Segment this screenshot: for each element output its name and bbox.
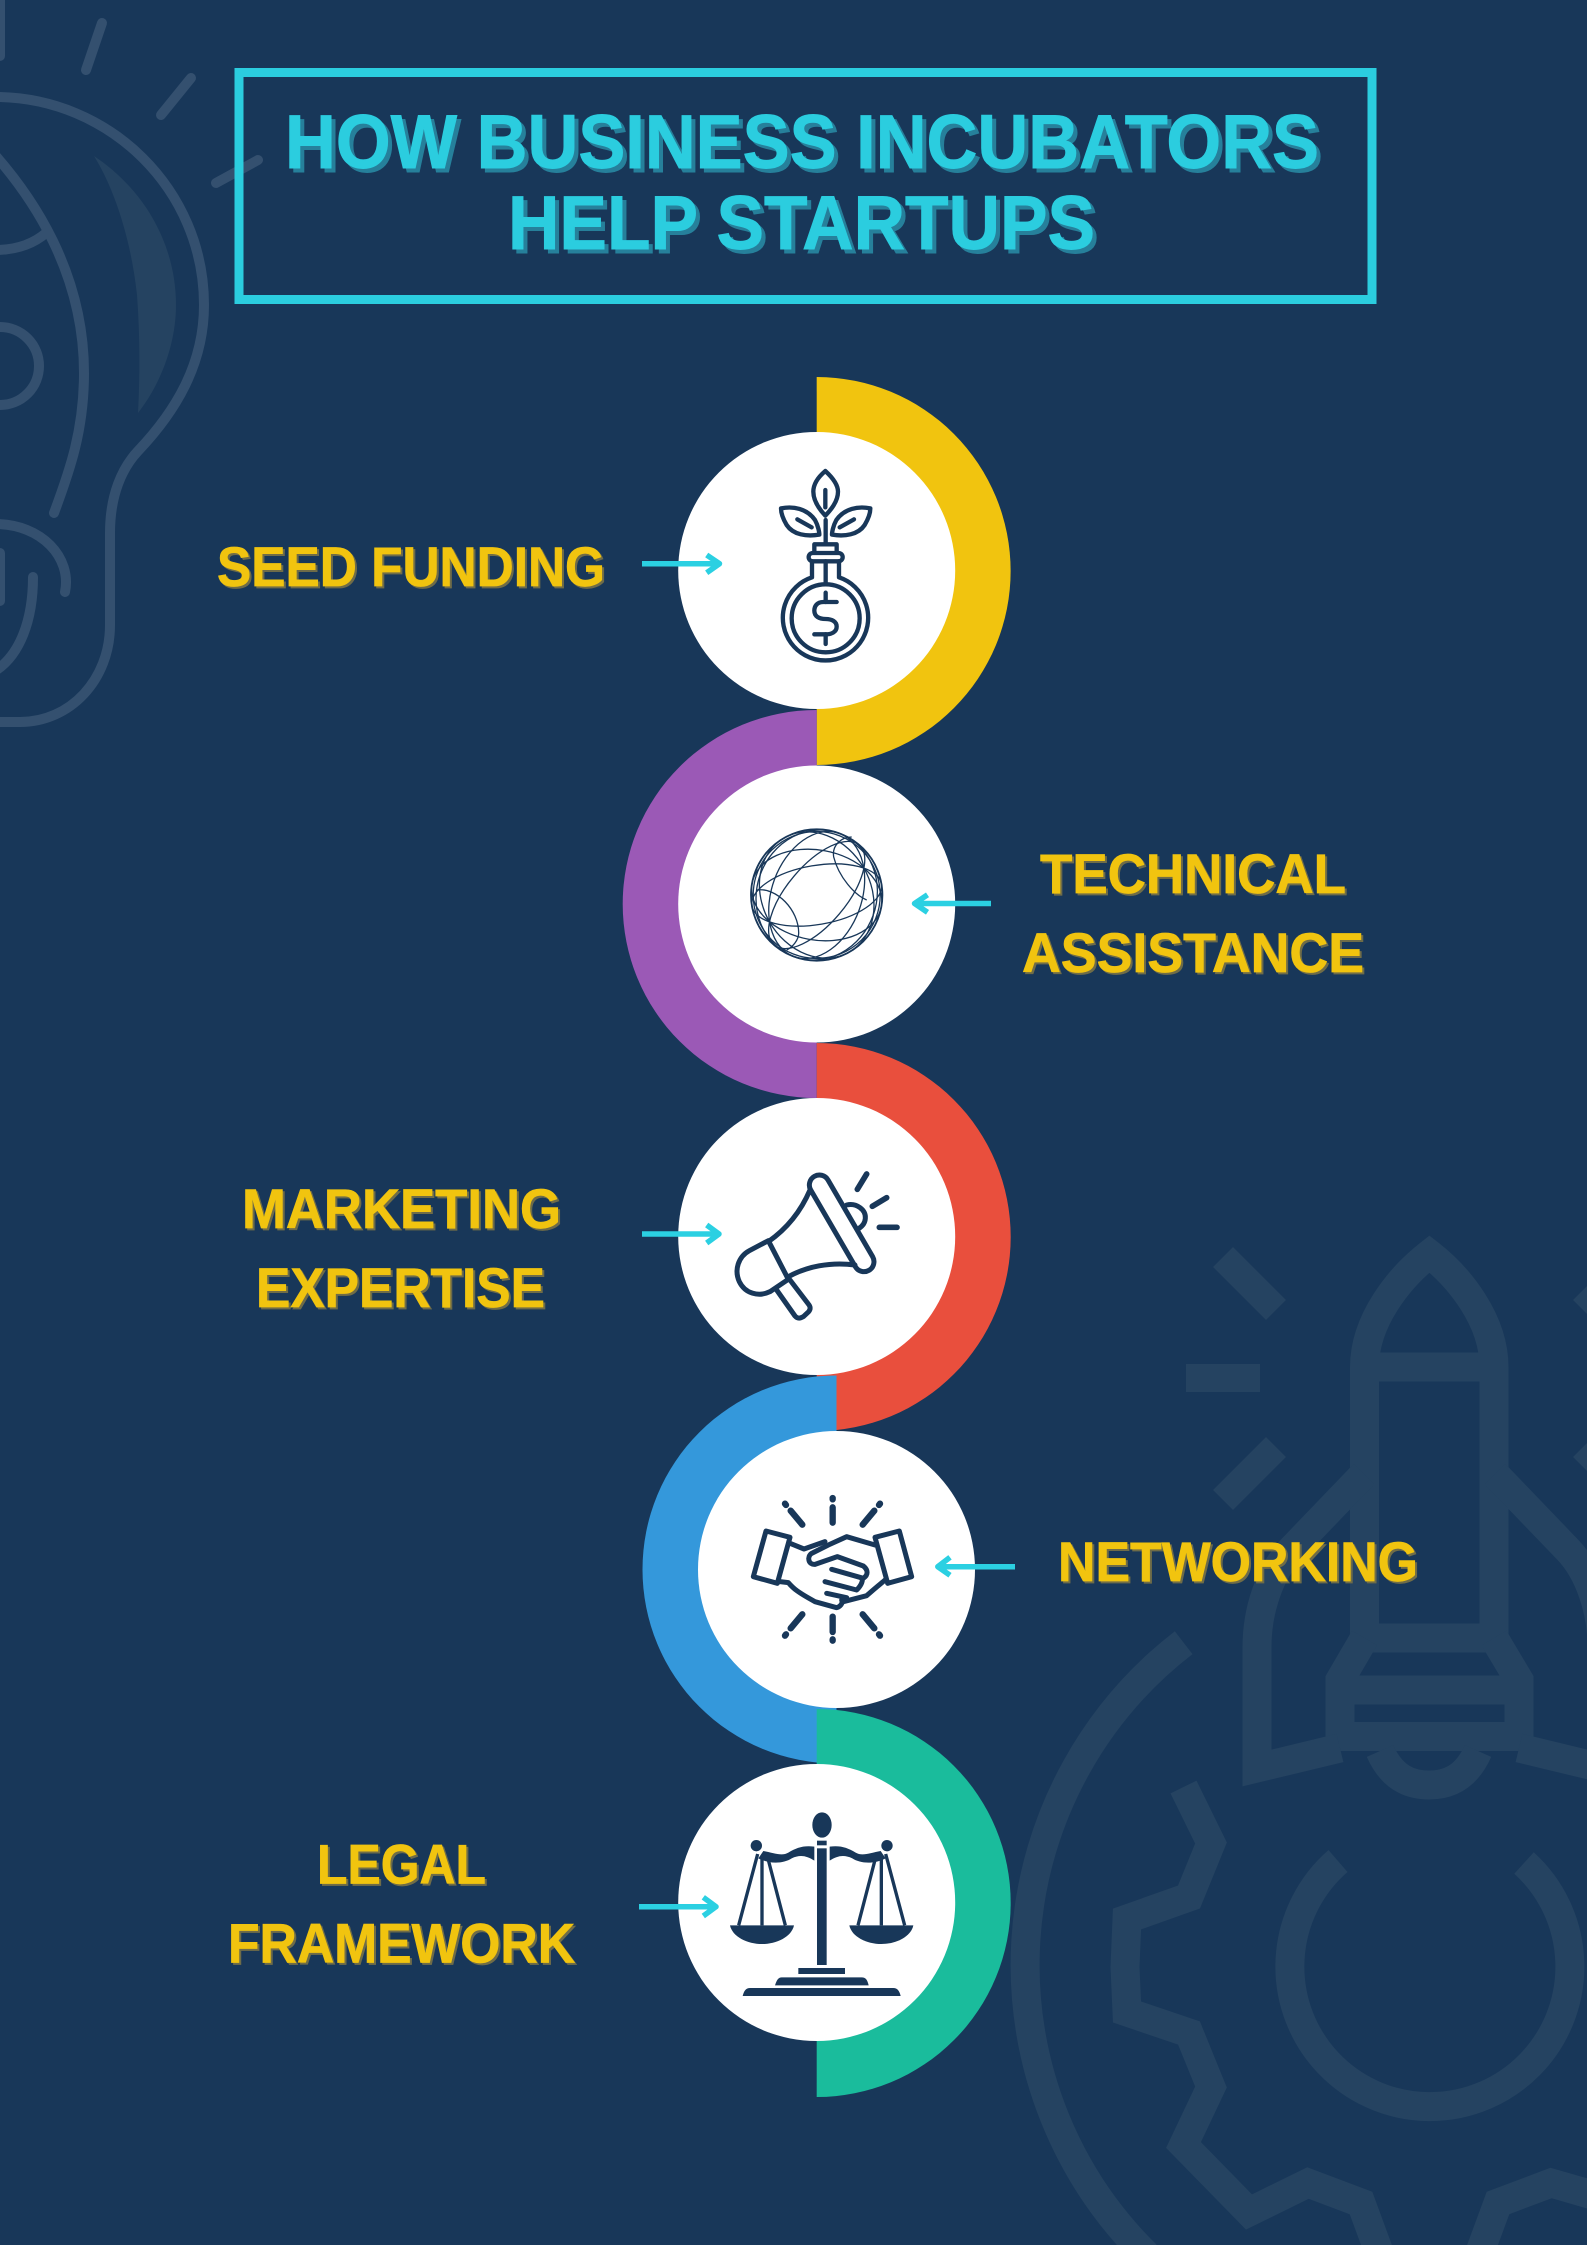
step 2: technical assistance <box>678 766 1364 1042</box>
title text: HOW BUSINESS INCUBATORS <box>285 100 1319 185</box>
step 3: marketing expertise <box>242 1098 955 1375</box>
label <box>1022 842 1364 984</box>
label: EXPERTISE <box>256 1256 545 1319</box>
arrow <box>642 555 720 573</box>
icon: scales of justice <box>730 1812 913 1996</box>
label <box>228 1832 575 1974</box>
arrow <box>914 895 991 912</box>
icon: wire globe <box>737 811 896 979</box>
label <box>242 1177 561 1319</box>
background decoration: light bulb <box>0 0 258 722</box>
title box <box>239 72 1372 300</box>
background decoration: rocket and gear <box>1025 1247 1587 2245</box>
label: LEGAL <box>317 1832 486 1896</box>
icon: megaphone <box>737 1171 897 1318</box>
step 4: networking <box>698 1431 1418 1708</box>
title text: HELP STARTUPS <box>508 181 1095 266</box>
label: NETWORKING <box>1058 1530 1418 1593</box>
step 5: legal framework <box>228 1764 955 2041</box>
icon: money plant flask <box>781 471 870 660</box>
title text <box>285 100 1319 266</box>
label: MARKETING <box>242 1177 561 1240</box>
arrow <box>639 1897 716 1916</box>
label: FRAMEWORK <box>228 1912 575 1974</box>
label: ASSISTANCE <box>1022 921 1364 984</box>
coloured half-ring chain <box>623 377 1011 2097</box>
label: SEED FUNDING <box>217 535 605 598</box>
step 1: seed funding <box>217 432 955 709</box>
arrow <box>938 1557 1015 1575</box>
icon: handshake <box>753 1498 912 1641</box>
label: TECHNICAL <box>1040 842 1346 905</box>
arrow <box>642 1225 719 1243</box>
